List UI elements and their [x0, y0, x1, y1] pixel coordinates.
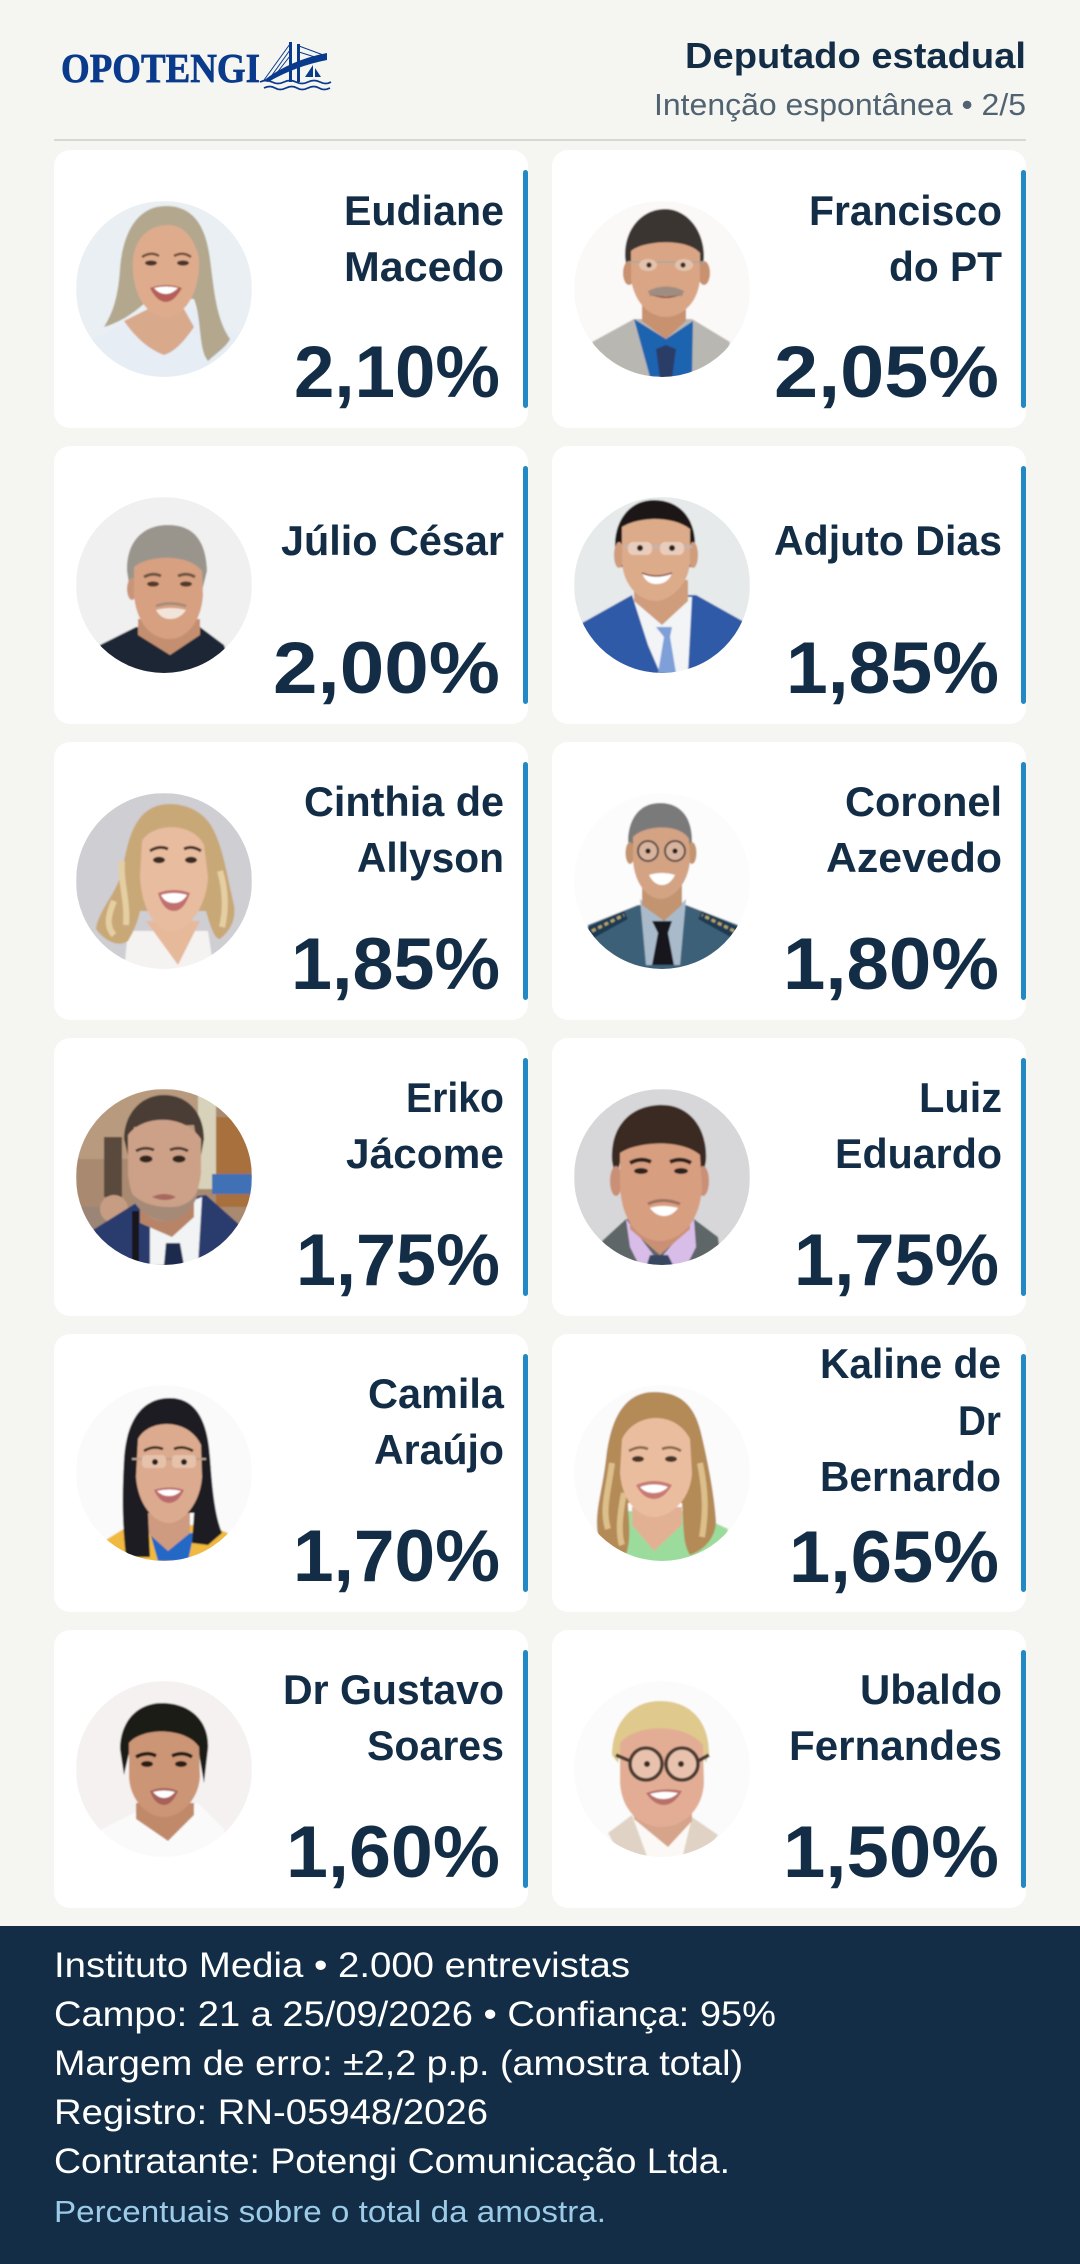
card background [552, 1630, 1026, 1908]
candidate name: Azevedo [826, 834, 1002, 881]
candidate name: Jácome [346, 1130, 504, 1177]
percentage: 1,80% [783, 924, 999, 1005]
card background [552, 742, 1026, 1020]
candidate name: Soares [367, 1722, 504, 1769]
percentage: 1,75% [296, 1220, 500, 1301]
accent bar [523, 466, 528, 704]
candidate name: Luiz [919, 1074, 1002, 1121]
card: Francisco do PT [552, 150, 1026, 428]
candidate name [283, 1666, 504, 1769]
portrait: Cinthia de Allyson [76, 793, 252, 971]
portrait: Adjuto Dias [574, 497, 750, 675]
candidate name: Eudiane [344, 187, 504, 234]
percentage: 1,50% [783, 1812, 999, 1893]
portrait: Dr Gustavo Soares [76, 1681, 252, 1859]
candidate name: Ubaldo [860, 1666, 1002, 1713]
header title [654, 35, 1026, 122]
card background [552, 1038, 1026, 1316]
portrait: Kaline de Dr Bernardo [596, 1391, 729, 1561]
card background [54, 446, 528, 724]
footnote: Percentuais sobre o total da amostra. [54, 2194, 606, 2229]
candidate name [789, 1666, 1002, 1769]
methodology text: Registro: RN-05948/2026 [54, 2093, 488, 2132]
accent bar [523, 1058, 528, 1296]
card: Adjuto Dias [552, 446, 1026, 724]
candidate name: Macedo [344, 243, 504, 290]
candidate name [346, 1074, 504, 1177]
candidate name [826, 778, 1002, 881]
card background [54, 1630, 528, 1908]
accent bar [523, 1650, 528, 1888]
candidate name: Júlio César [281, 517, 504, 564]
candidate name: Coronel [845, 778, 1002, 825]
card background [54, 150, 528, 428]
candidate name [304, 778, 504, 881]
card: Kaline de Dr Bernardo [552, 1334, 1026, 1612]
methodology text [54, 1946, 776, 2181]
accent bar [1021, 170, 1026, 408]
portrait: Júlio César [76, 497, 252, 675]
candidate name: do PT [889, 243, 1002, 290]
percentage: 1,70% [293, 1516, 500, 1597]
candidate name [809, 187, 1002, 290]
card background [552, 1334, 1026, 1612]
percentage: 1,65% [789, 1517, 999, 1598]
percentage: 2,05% [774, 332, 999, 413]
accent bar [1021, 466, 1026, 704]
percentage: 1,85% [291, 924, 500, 1005]
card: Eriko Jácome [54, 1038, 528, 1316]
candidate name: Fernandes [789, 1722, 1002, 1769]
card: Cinthia de Allyson [54, 742, 528, 1020]
card: Luiz Eduardo [552, 1038, 1026, 1316]
card: Coronel Azevedo [552, 742, 1026, 1020]
accent bar [523, 170, 528, 408]
candidate name [835, 1074, 1002, 1177]
candidate name: Adjuto Dias [774, 517, 1002, 564]
methodology text: Campo: 21 a 25/09/2026 • Confiança: 95% [54, 1995, 776, 2034]
portrait: Eudiane Macedo [76, 201, 252, 379]
accent bar [523, 762, 528, 1000]
percentage: 1,75% [794, 1220, 999, 1301]
methodology text: Instituto Media • 2.000 entrevistas [54, 1946, 630, 1985]
candidate name: Allyson [357, 834, 504, 881]
accent bar [1021, 1354, 1026, 1592]
methodology text: Contratante: Potengi Comunicação Ltda. [54, 2142, 730, 2181]
card background [552, 446, 1026, 724]
card: Camila Araújo [54, 1334, 528, 1612]
candidate name [344, 187, 504, 290]
accent bar [1021, 762, 1026, 1000]
candidate name: Araújo [374, 1426, 504, 1473]
footer panel: methodology [0, 1926, 1080, 2264]
candidate name: Cinthia de [304, 778, 504, 825]
accent bar [523, 1354, 528, 1592]
methodology text: Margem de erro: ±2,2 p.p. (amostra total) [54, 2044, 743, 2083]
percentage: 2,00% [273, 628, 500, 709]
card: Eudiane Macedo [54, 150, 528, 428]
candidate name: Francisco [809, 187, 1002, 234]
percentage: 1,85% [786, 628, 999, 709]
candidate name: Bernardo [820, 1453, 1001, 1500]
percentage: 2,10% [294, 332, 500, 413]
candidate name: Kaline de [820, 1340, 1001, 1387]
card background [54, 742, 528, 1020]
portrait: Ubaldo Fernandes [608, 1700, 718, 1857]
percentage: 1,60% [286, 1812, 500, 1893]
candidate name: Eduardo [835, 1130, 1002, 1177]
candidate name [368, 1370, 505, 1473]
candidate name: Dr Gustavo [283, 1666, 504, 1713]
accent bar [1021, 1058, 1026, 1296]
candidate name: Eriko [406, 1074, 504, 1121]
candidate name: Dr [958, 1397, 1001, 1444]
portrait: Coronel Azevedo [586, 802, 738, 969]
card background [54, 1334, 528, 1612]
portrait: Camila Araújo [106, 1396, 228, 1561]
card: Dr Gustavo Soares [54, 1630, 528, 1908]
card background [552, 150, 1026, 428]
card: Ubaldo Fernandes [552, 1630, 1026, 1908]
portrait: Eriko Jácome [76, 1089, 252, 1267]
accent bar [1021, 1650, 1026, 1888]
header title: Deputado estadual [685, 35, 1026, 76]
card: Júlio César [54, 446, 528, 724]
header title: Intenção espontânea • 2/5 [654, 87, 1026, 122]
portrait: Francisco do PT [592, 208, 731, 377]
logo: O Potengi: OPOTENGI [61, 45, 260, 91]
portrait: Luiz Eduardo [574, 1089, 750, 1267]
candidate name [820, 1340, 1001, 1500]
candidate name: Camila [368, 1370, 505, 1417]
card background [54, 1038, 528, 1316]
